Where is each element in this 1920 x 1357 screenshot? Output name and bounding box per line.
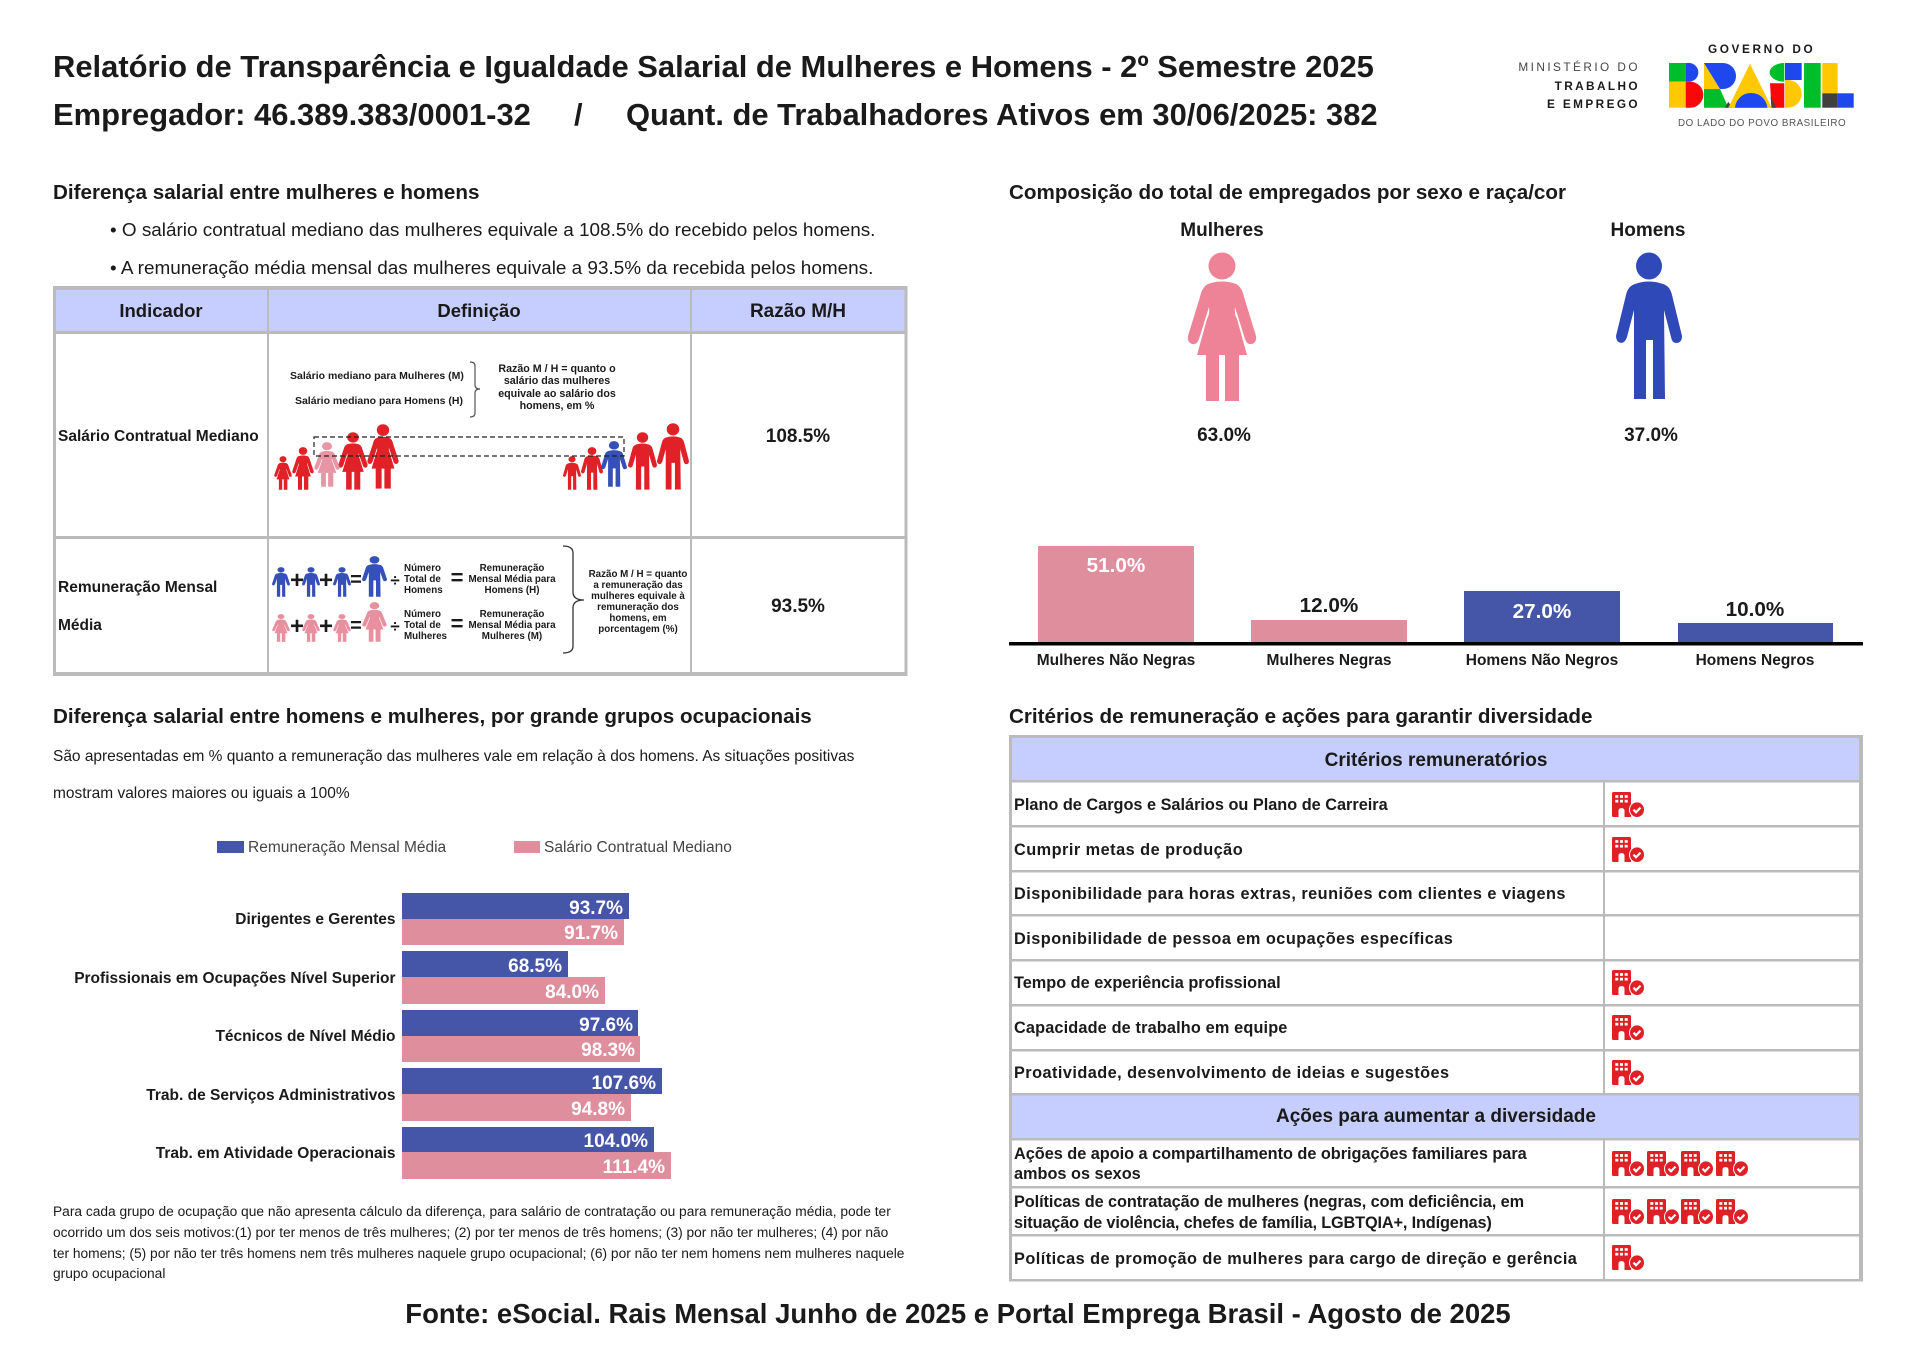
criteria rows: Capacidade de trabalho em equipe xyxy=(1014,1019,1288,1037)
bar chart: grupos ocupacionais: Técnicos de Nível Médio xyxy=(215,1028,396,1045)
row: salário contratual mediano xyxy=(58,426,830,447)
criteria rows: Cumprir metas de produção xyxy=(1014,841,1243,859)
bullets: • O salário contratual mediano das mulheres equivale a 108.5% do recebido pelos homens. xyxy=(110,220,875,241)
diagram: remuneração média: + xyxy=(290,613,304,640)
icon: man xyxy=(1616,252,1682,399)
panel: mulheres: Mulheres xyxy=(1180,220,1264,241)
diagram: remuneração média: ÷ xyxy=(390,617,400,636)
diagram: salário mediano: salário das mulheres xyxy=(504,375,610,387)
icons: empresa xyxy=(1612,792,1748,1271)
heading: diferença salarial: Diferença salarial entre mulheres e homens xyxy=(53,181,479,204)
bar chart: grupos ocupacionais: 91.7% xyxy=(564,923,618,944)
table: critérios xyxy=(1009,735,1863,1282)
bar chart: grupos ocupacionais: Profissionais em Ocupações Nível Superior xyxy=(74,970,396,987)
diagram: remuneração média: Mulheres xyxy=(404,631,448,642)
diagram: remuneração média: + xyxy=(290,567,304,594)
row: salário contratual mediano: Salário Contratual Mediano xyxy=(58,428,259,445)
bar chart: sexo e raça: 51.0% xyxy=(1087,554,1145,577)
bar chart: grupos ocupacionais: Trab. em Atividade Operacionais xyxy=(156,1145,396,1162)
note: motivos: ocorrido um dos seis motivos:(1) por ter menos de três mulheres; (2) por ter menos de três homens; (3) por não ter mulheres; (4) por não xyxy=(53,1225,889,1240)
diagram: remuneração média: remuneração dos xyxy=(597,602,679,613)
heading: composição: Composição do total de empregados por sexo e raça/cor xyxy=(1009,181,1566,204)
table: indicadores xyxy=(53,286,908,676)
legend: Remuneração Mensal Média xyxy=(248,839,447,856)
action rows: Políticas de contratação de mulheres (negras, com deficiência, em xyxy=(1014,1193,1524,1211)
bar chart: grupos ocupacionais: 97.6% xyxy=(579,1015,633,1036)
note: motivos: Para cada grupo de ocupação que não apresenta cálculo da diferença, para salário de contratação ou para remuneração média, pode ter xyxy=(53,1204,891,1219)
text: explicação xyxy=(53,748,855,802)
title: Empregador: 46.389.383/0001-32 xyxy=(53,97,531,132)
diagram: remuneração média: Total de xyxy=(404,620,441,631)
title: / xyxy=(574,97,583,132)
panel: mulheres: 63.0% xyxy=(1197,425,1251,446)
panel: homens xyxy=(1611,220,1685,446)
table header: ações: Ações para aumentar a diversidade xyxy=(1276,1106,1596,1127)
table header: Indicador xyxy=(119,300,203,321)
diagram: salário mediano: homens, em % xyxy=(520,400,595,412)
bar chart: grupos ocupacionais: 111.4% xyxy=(603,1157,665,1178)
diagram: remuneração média: + xyxy=(319,613,333,640)
bar chart: grupos ocupacionais xyxy=(74,893,671,1179)
criteria rows: Proatividade, desenvolvimento de ideias e sugestões xyxy=(1014,1064,1450,1082)
bar chart: grupos ocupacionais: 98.3% xyxy=(581,1040,635,1061)
action rows: Políticas de promoção de mulheres para cargo de direção e gerência xyxy=(1014,1250,1578,1268)
diagram: remuneração média: Mensal Média para xyxy=(468,620,556,631)
diagram: remuneração média: mulheres equivale à xyxy=(591,591,685,602)
bar chart: sexo e raça: Mulheres Não Negras xyxy=(1037,652,1195,669)
row: salário contratual mediano: 108.5% xyxy=(766,426,830,447)
source: Fonte: eSocial. Rais Mensal Junho de 2025 e Portal Emprega Brasil - Agosto de 2025 xyxy=(405,1298,1511,1329)
title: Relatório de Transparência e Igualdade Salarial de Mulheres e Homens - 2º Semestre 2025 xyxy=(53,49,1374,84)
diagram: remuneração média: porcentagem (%) xyxy=(598,624,678,635)
diagram: remuneração média: = xyxy=(350,615,362,637)
bar chart: grupos ocupacionais: 68.5% xyxy=(508,956,562,977)
panel: homens: 37.0% xyxy=(1624,425,1678,446)
bar chart: grupos ocupacionais: 107.6% xyxy=(592,1073,656,1094)
bar chart: grupos ocupacionais: Trab. de Serviços Administrativos xyxy=(146,1087,396,1104)
bar chart: grupos ocupacionais: Dirigentes e Gerentes xyxy=(235,911,396,928)
diagram: salário mediano xyxy=(274,362,689,490)
note: motivos: grupo ocupacional xyxy=(53,1266,165,1281)
diagram: remuneração média: Remuneração xyxy=(480,563,544,574)
bar chart: sexo e raça: 27.0% xyxy=(1513,600,1571,623)
action rows: ambos os sexos xyxy=(1014,1165,1141,1183)
diagram: remuneração média: Mensal Média para xyxy=(468,574,556,585)
title xyxy=(53,49,1378,132)
criteria rows: Tempo de experiência profissional xyxy=(1014,974,1281,992)
panel: homens: Homens xyxy=(1611,220,1685,241)
diagram: remuneração média: Remuneração xyxy=(480,609,544,620)
legend: Salário Contratual Mediano xyxy=(544,839,732,856)
criteria rows: Disponibilidade para horas extras, reuniões com clientes e viagens xyxy=(1014,885,1566,903)
row: remuneração mensal média: 93.5% xyxy=(771,596,825,617)
diagram: remuneração média: Total de xyxy=(404,574,441,585)
diagram: remuneração média: = xyxy=(451,565,463,590)
diagram: remuneração média: ÷ xyxy=(390,571,400,590)
diagram: remuneração média: Número xyxy=(404,609,441,620)
bar chart: sexo e raça: Homens Não Negros xyxy=(1466,652,1618,669)
bar chart: sexo e raça: Mulheres Negras xyxy=(1267,652,1391,669)
bar chart: sexo e raça xyxy=(1009,546,1863,669)
diagram: salário mediano: Razão M / H = quanto o xyxy=(498,363,616,375)
table header: critérios remuneratórios: Critérios remuneratórios xyxy=(1325,750,1547,771)
diagram: remuneração média: Razão M / H = quanto xyxy=(589,569,687,580)
diagram: salário mediano: Salário mediano para Mulheres (M) xyxy=(290,370,464,382)
bullets xyxy=(110,220,875,279)
legend xyxy=(217,839,732,856)
diagram: remuneração média xyxy=(272,546,687,653)
bar chart: grupos ocupacionais: 93.7% xyxy=(569,898,623,919)
action rows xyxy=(1014,1145,1578,1268)
icon: woman xyxy=(1188,252,1256,401)
diagram: remuneração média: homens, em xyxy=(609,613,667,624)
diagram: remuneração média: Número xyxy=(404,563,441,574)
row: remuneração mensal média: Remuneração Mensal xyxy=(58,579,217,596)
bullets: • A remuneração média mensal das mulheres equivale a 93.5% da recebida pelos homens. xyxy=(110,258,873,279)
diagram: remuneração média: = xyxy=(350,569,362,591)
bar chart: grupos ocupacionais: 94.8% xyxy=(571,1099,625,1120)
logo: ministério and governo do brasil: E EMPREGO xyxy=(1547,97,1640,111)
diagram: salário mediano: equivale ao salário dos xyxy=(498,388,616,400)
table header: Razão M/H xyxy=(750,301,846,322)
bar chart: grupos ocupacionais: 104.0% xyxy=(584,1131,648,1152)
diagram: remuneração média: + xyxy=(319,567,333,594)
row: remuneração mensal média: Média xyxy=(58,617,102,634)
logo: ministério and governo do brasil xyxy=(1518,42,1854,129)
heading: critérios: Critérios de remuneração e ações para garantir diversidade xyxy=(1009,705,1592,728)
note: motivos xyxy=(53,1204,905,1281)
diagram: remuneração média: Mulheres (M) xyxy=(482,631,542,642)
table header: Definição xyxy=(437,300,521,321)
diagram: remuneração média: Homens xyxy=(404,585,443,596)
bar chart: grupos ocupacionais: 84.0% xyxy=(545,982,599,1003)
logo: ministério and governo do brasil: MINISTÉRIO DO xyxy=(1518,60,1640,74)
diagram: remuneração média: Homens (H) xyxy=(485,585,539,596)
diagram: salário mediano: Salário mediano para Homens (H) xyxy=(295,395,463,407)
criteria rows xyxy=(1014,796,1566,1082)
panel: mulheres xyxy=(1180,220,1264,446)
bar chart: sexo e raça: 10.0% xyxy=(1726,598,1784,621)
note: motivos: ter homens; (5) por não ter três homens nem três mulheres naquele grupo ocupacional; (6) por não ter nem homens nem mulheres naquele xyxy=(53,1246,905,1261)
logo: ministério and governo do brasil: TRABALHO xyxy=(1555,79,1640,93)
logo: ministério and governo do brasil: DO LADO DO POVO BRASILEIRO xyxy=(1678,118,1846,129)
bar chart: sexo e raça: Homens Negros xyxy=(1696,652,1814,669)
criteria rows: Plano de Cargos e Salários ou Plano de Carreira xyxy=(1014,796,1389,814)
row: remuneração mensal média xyxy=(58,579,825,634)
logo: ministério and governo do brasil: GOVERNO DO xyxy=(1708,42,1815,56)
criteria rows: Disponibilidade de pessoa em ocupações específicas xyxy=(1014,930,1453,948)
action rows: situação de violência, chefes de família, LGBTQIA+, Indígenas) xyxy=(1014,1214,1492,1232)
action rows: Ações de apoio a compartilhamento de obrigações familiares para xyxy=(1014,1145,1528,1163)
heading: grupos ocupacionais: Diferença salarial entre homens e mulheres, por grande grupos ocupacionais xyxy=(53,705,812,728)
diagram: remuneração média: = xyxy=(451,611,463,636)
bar chart: sexo e raça: 12.0% xyxy=(1300,594,1358,617)
diagram: remuneração média: a remuneração das xyxy=(593,580,683,591)
text: explicação: mostram valores maiores ou iguais a 100% xyxy=(53,785,350,802)
text: explicação: São apresentadas em % quanto a remuneração das mulheres vale em relação à dos homens. As situações positivas xyxy=(53,748,855,765)
table header xyxy=(119,300,846,322)
title: Quant. de Trabalhadores Ativos em 30/06/2025: 382 xyxy=(626,97,1378,132)
